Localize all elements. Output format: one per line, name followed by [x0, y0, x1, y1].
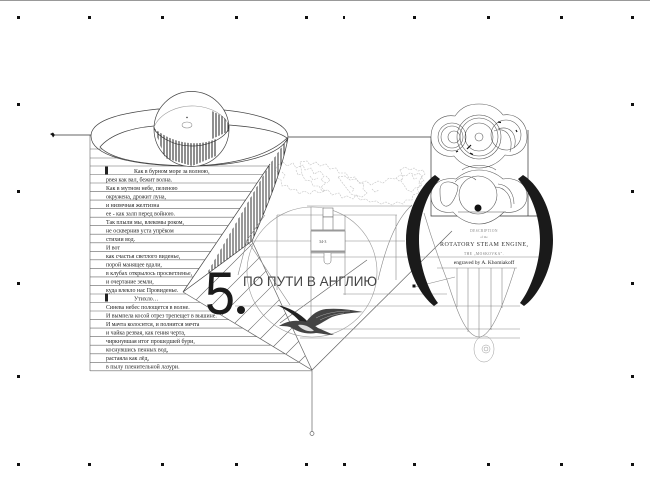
- poem text: и низмчная желтизна: [106, 203, 160, 209]
- tree sketch: [275, 161, 425, 205]
- diamond outline and stem: [183, 231, 452, 436]
- engine diagram bottom: [431, 170, 527, 224]
- poem text: окружена, дрожит луна,: [106, 194, 167, 200]
- poem text: как счастья светлого виденье,: [106, 254, 181, 260]
- poem text: не осквернив уста упрёком: [106, 228, 174, 234]
- poem text: Как в мутном небе, пеленою: [106, 185, 178, 192]
- engine title block: DESCRIPTION: [470, 229, 498, 233]
- diamond hatch: [196, 243, 306, 362]
- poem text: И вот: [106, 246, 120, 252]
- bowl: [91, 109, 288, 166]
- piston: 34-3: [319, 239, 326, 244]
- piston: [311, 208, 345, 264]
- poem text: рвея как вал, бежит волна.: [106, 176, 173, 184]
- text rules: [90, 135, 312, 371]
- poem text: Как в бурном море за волною,: [134, 168, 210, 175]
- poem text: куда влекло нас Провиденье.: [106, 288, 179, 294]
- left parenthesis: [406, 175, 440, 306]
- poem text: в пылу пленительной лазури.: [106, 364, 180, 370]
- bowl connector lines: [55, 130, 537, 216]
- poem text: чиркнувшая итог прошедшей бури,: [106, 338, 195, 345]
- chapter number: 5: [205, 260, 235, 327]
- poem text: И вымпела косой отрез трепещет в вышине.: [106, 312, 217, 320]
- circle construction diagram: [235, 205, 540, 338]
- poem text: и чайка резвая, как гения черта,: [106, 330, 186, 336]
- poem text: коснувшись пенных вод,: [106, 348, 169, 354]
- engine black dot: [474, 204, 482, 212]
- black square marker: [412, 284, 416, 288]
- engine title block: of the: [480, 235, 488, 239]
- top edge rule: [0, 0, 650, 1]
- block marker two: [105, 294, 108, 302]
- poem text: Синева небес полощется в волне.: [106, 304, 190, 311]
- engine title block: THE „MOSKOVKA".: [464, 252, 504, 257]
- engine diagram top: [431, 104, 527, 170]
- block marker one: [105, 166, 108, 174]
- poem text: Утихло…: [134, 296, 159, 302]
- poem text: ее - как залп перед войною.: [106, 210, 175, 218]
- engine title block: ROTATORY STEAM ENGINE,: [440, 242, 528, 248]
- chapter title: ПО ПУТИ В АНГЛИЮ: [243, 273, 377, 289]
- poem text: порой манящее вдали,: [106, 262, 162, 268]
- cone outline: [183, 138, 288, 292]
- poem text: [105, 166, 217, 370]
- engine lower small circle: [474, 336, 494, 362]
- cone stripes: [206, 139, 288, 274]
- sphere: [154, 92, 229, 170]
- engine title block: [440, 229, 528, 266]
- bird: [277, 305, 363, 335]
- poem text: Так плыли мы, влекомы роком,: [106, 220, 184, 226]
- poem text: И мачта колоснтся, и полнится мечта: [106, 322, 200, 328]
- left arrow tip: [50, 132, 55, 138]
- right parenthesis: [518, 175, 553, 306]
- poem text: в клубах открылось просветленье,: [106, 270, 193, 277]
- engine title block: engraved by A. Khomiakoff: [454, 259, 514, 266]
- poem text: растаяла как лёд,: [106, 356, 149, 362]
- poem text: стихии вод.: [106, 237, 136, 243]
- poem text: и очертание земли,: [106, 280, 154, 286]
